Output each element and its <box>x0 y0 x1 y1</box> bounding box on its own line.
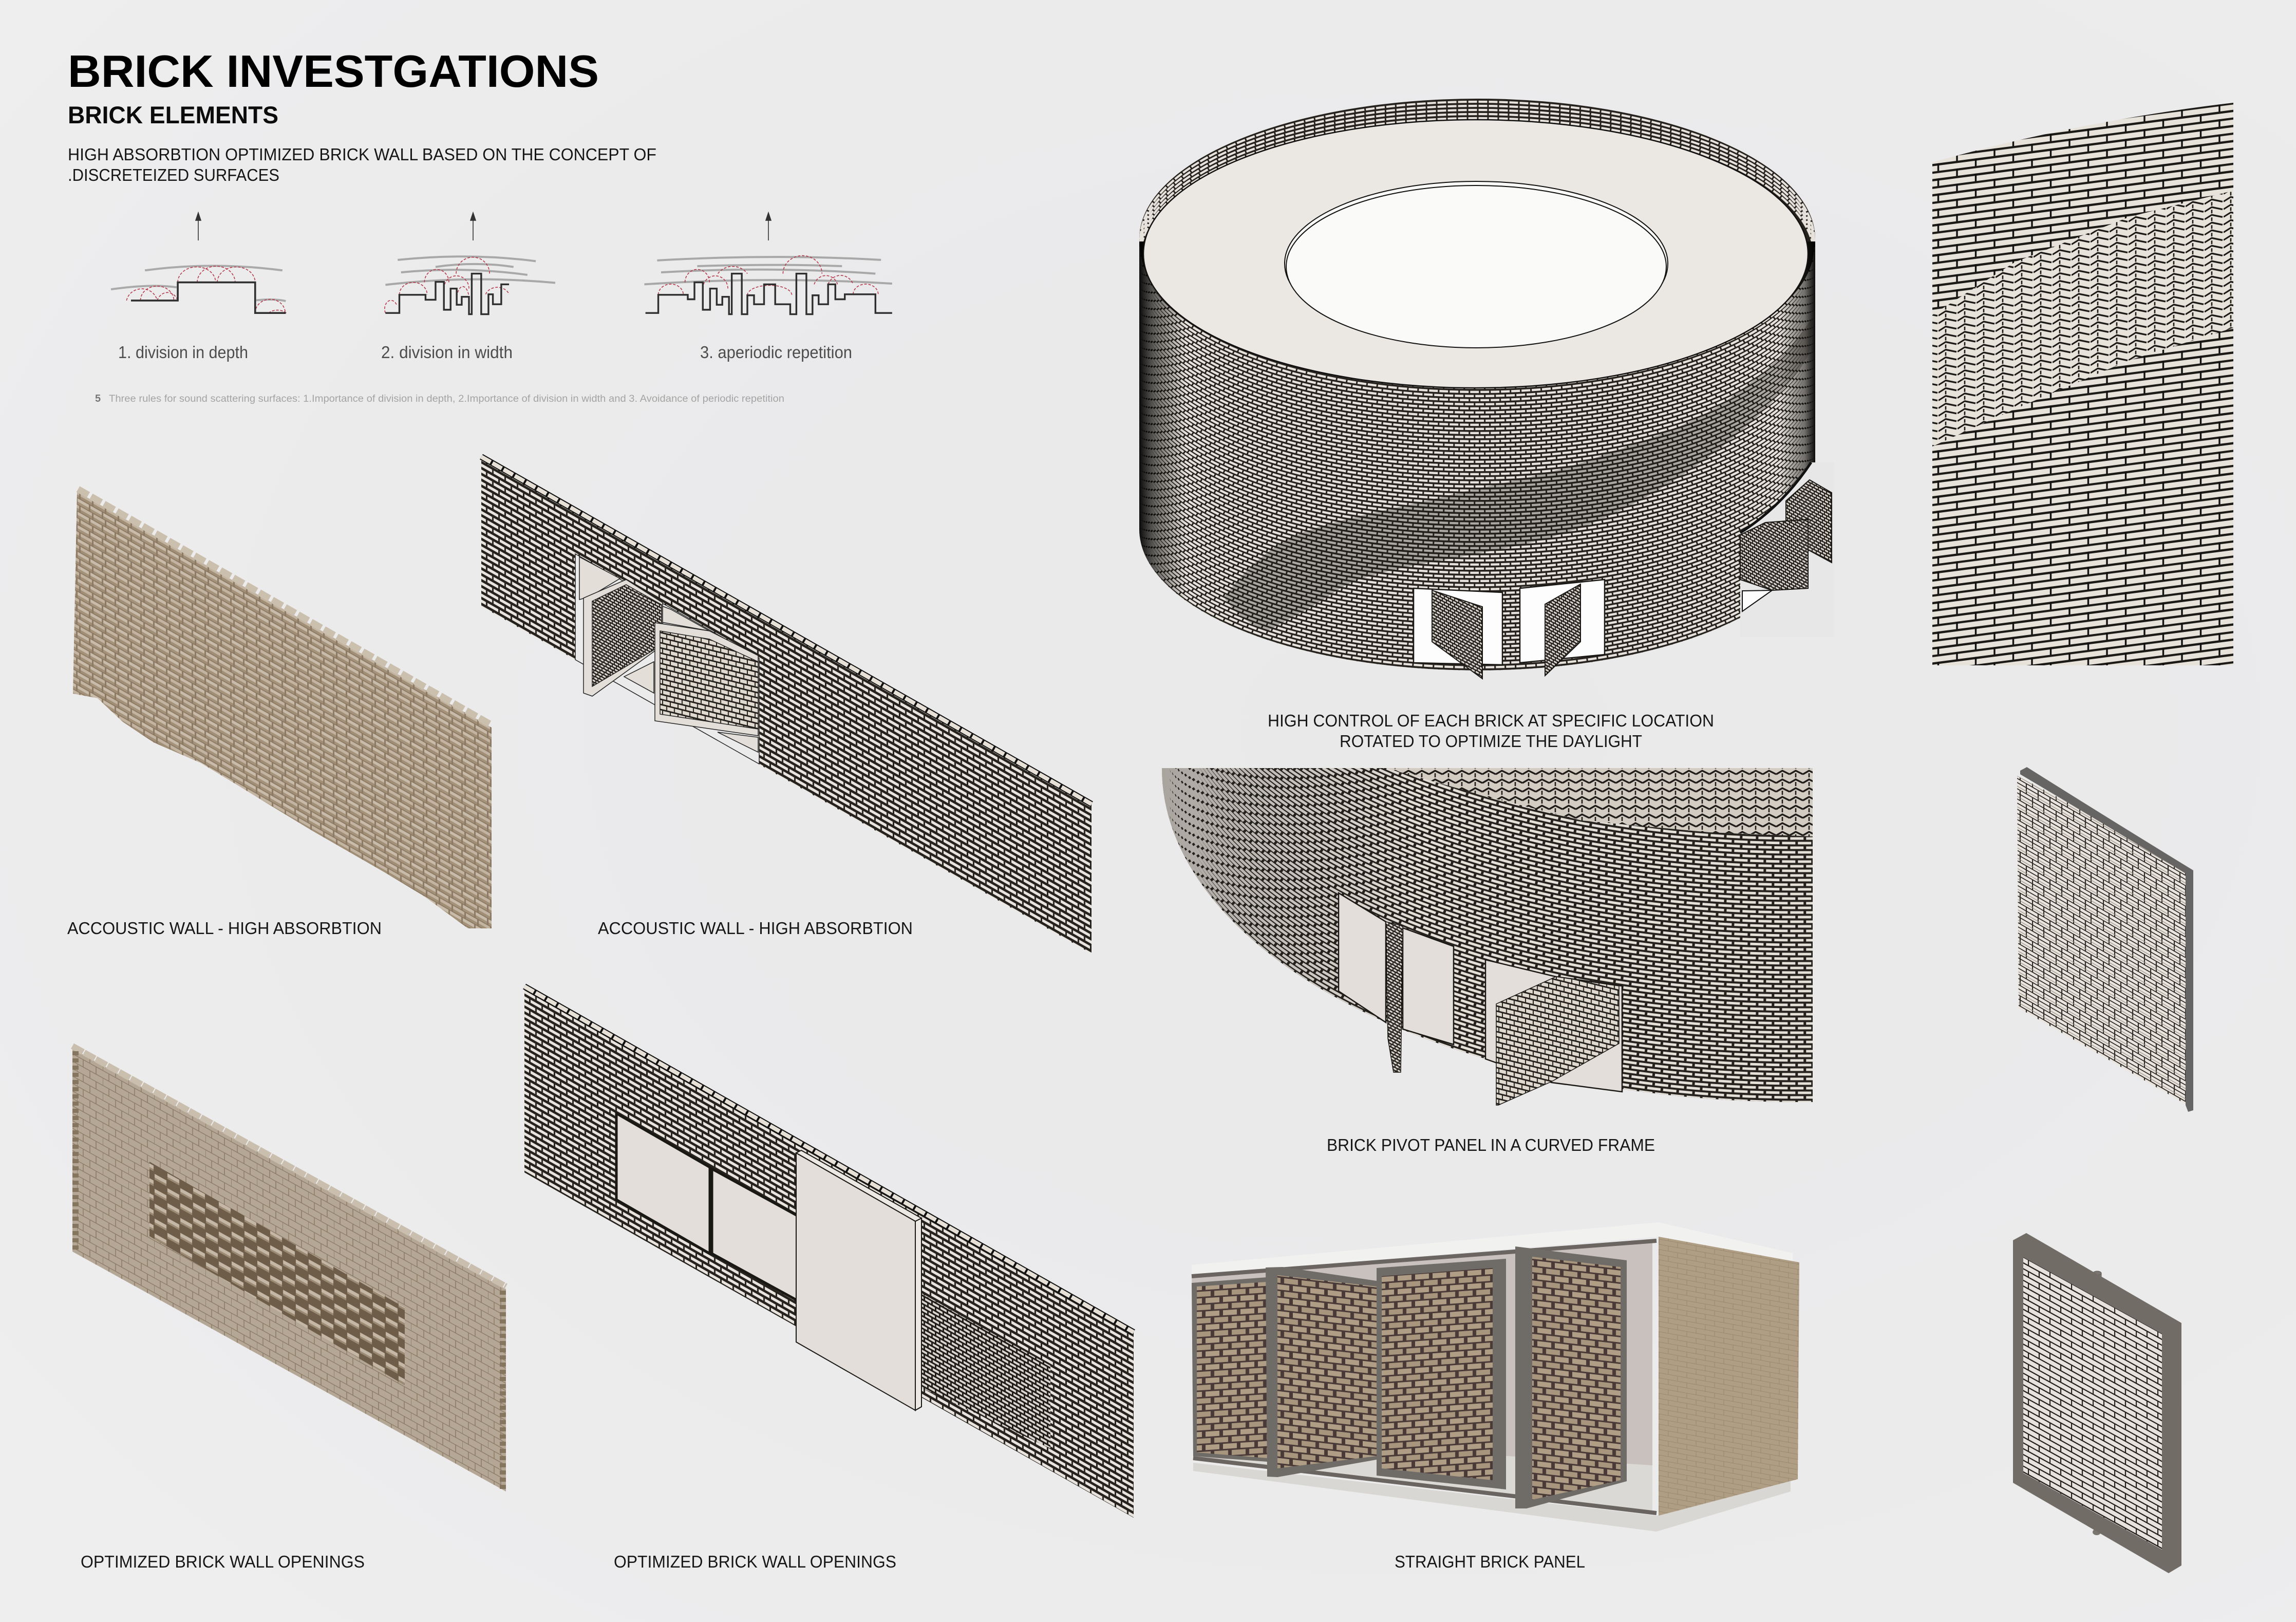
brick mesh <box>2023 1257 2162 1550</box>
top pivot <box>2093 1271 2101 1284</box>
cylinder body bricks <box>1139 241 1815 713</box>
icon: arrow 1 <box>196 213 201 240</box>
footnote: 5 <box>95 393 101 404</box>
ceiling slab <box>1192 1222 1793 1275</box>
door panel 3 <box>1377 1259 1506 1489</box>
panel: framed straight panel <box>2013 1233 2181 1573</box>
bottom rail <box>1193 1458 1657 1513</box>
caption: cylinder: HIGH CONTROL OF EACH BRICK AT SPECIFIC LOCATION <box>1268 711 1714 730</box>
caption: acoustic wall left: ACCOUSTIC WALL - HIGH ABSORBTION <box>67 919 382 938</box>
door panel 1 <box>1192 1277 1267 1462</box>
brick caps <box>524 986 1134 1332</box>
window 1 <box>616 1113 710 1254</box>
icon: arrow 2 <box>471 213 476 240</box>
door 2 <box>655 623 758 736</box>
outer frame <box>2013 1233 2181 1573</box>
interior back wall <box>1192 1242 1652 1512</box>
bottom pivot <box>2093 1529 2101 1535</box>
interior floor <box>1193 1456 1652 1512</box>
intro text <box>68 145 656 184</box>
right side door near <box>1740 519 1808 590</box>
sliding solid panel <box>796 1150 921 1410</box>
rim bricks <box>1139 99 1815 396</box>
top frame <box>2020 767 2193 873</box>
diagonal rotated-brick band <box>1224 316 1813 631</box>
label 2: 2. division in width <box>381 343 513 362</box>
caption: curved frame: BRICK PIVOT PANEL IN A CURVED FRAME <box>1327 1135 1655 1154</box>
door panel 4 <box>1515 1246 1627 1508</box>
right side frame <box>1740 462 1811 533</box>
caption: optimized wall right: OPTIMIZED BRICK WALL OPENINGS <box>614 1552 896 1571</box>
right side cut-out <box>1740 462 1834 637</box>
edge-on pivot door <box>1386 922 1403 1072</box>
footnote: Three rules for sound scattering surfaces: 1.Importance of division in depth, 2.Importance of division in width and 3. Avoidance of periodic repetition <box>109 394 784 404</box>
caption: straight panel: STRAIGHT BRICK PANEL <box>1395 1552 1585 1571</box>
opening centre <box>1403 928 1454 1045</box>
wall opening <box>575 554 759 764</box>
wall body <box>524 987 1134 1518</box>
opening left <box>1339 893 1386 1022</box>
brick surface <box>1932 103 2233 665</box>
floor slab <box>1193 1463 1791 1532</box>
panel: brick cylinder <box>1139 99 1834 713</box>
panel: curved frame close-up <box>1162 768 1813 1106</box>
caption: optimized wall left: OPTIMIZED BRICK WALL OPENINGS <box>81 1552 365 1571</box>
side teeth <box>76 1051 503 1490</box>
roof disc <box>1143 120 1808 388</box>
icon: arrow 3 <box>766 213 771 240</box>
curved brick surface <box>1162 768 1813 1102</box>
tan end wall <box>1659 1237 1799 1516</box>
panel: tan acoustic wall <box>73 489 492 928</box>
darker mesh region <box>920 1293 1050 1448</box>
caption: cylinder <box>1268 711 1714 751</box>
diagram 3: aperiodic repetition <box>644 213 892 362</box>
panel: flat brick elevation detail <box>1932 103 2233 665</box>
wall body <box>73 492 492 928</box>
rotated brick band <box>1932 191 2233 446</box>
panel: curved single panel <box>2017 767 2193 1112</box>
panel: acoustic wall with pivot doors <box>481 457 1091 954</box>
wall body <box>481 457 1091 954</box>
recessed brick field <box>149 1162 405 1385</box>
interior reveals <box>579 557 758 752</box>
caption: cylinder: ROTATED TO OPTIMIZE THE DAYLIGHT <box>1340 732 1642 751</box>
door panel 2 <box>1266 1267 1377 1477</box>
brick caps <box>481 457 1091 804</box>
window 2 <box>712 1169 797 1300</box>
door 1 <box>584 580 663 696</box>
label 1: 1. division in depth <box>118 343 248 362</box>
open pivot door <box>1496 977 1619 1105</box>
panel: straight brick panel module <box>1192 1222 1799 1532</box>
panel: wall with windows and sliding panel <box>524 986 1134 1518</box>
label 3: 3. aperiodic repetition <box>700 343 852 362</box>
intro text: HIGH ABSORBTION OPTIMIZED BRICK WALL BASED ON THE CONCEPT OF <box>68 145 656 164</box>
caption: acoustic wall right: ACCOUSTIC WALL - HIGH ABSORBTION <box>598 919 913 938</box>
brick mesh <box>2017 776 2186 1104</box>
panel: sound scattering diagrams <box>95 213 892 404</box>
right side door far <box>1786 480 1832 563</box>
brick caps <box>72 1046 506 1287</box>
skylight <box>1285 181 1668 348</box>
diagram 1: division in depth <box>111 213 286 362</box>
diagram 2: division in width <box>381 213 555 362</box>
subtitle: BRICK ELEMENTS <box>68 101 278 128</box>
opening right <box>1485 960 1622 1092</box>
front door right <box>1545 584 1580 676</box>
title: BRICK INVESTGATIONS <box>68 46 599 97</box>
wall body <box>72 1049 506 1492</box>
side frame <box>2186 870 2193 1112</box>
front door left <box>1432 590 1482 679</box>
top rail <box>1192 1241 1657 1276</box>
intro text: .DISCRETEIZED SURFACES <box>68 165 279 184</box>
front openings <box>1414 580 1605 665</box>
panel: tan wall with recess <box>72 1046 506 1492</box>
brick caps <box>78 489 492 725</box>
right side glazing <box>1742 590 1772 611</box>
